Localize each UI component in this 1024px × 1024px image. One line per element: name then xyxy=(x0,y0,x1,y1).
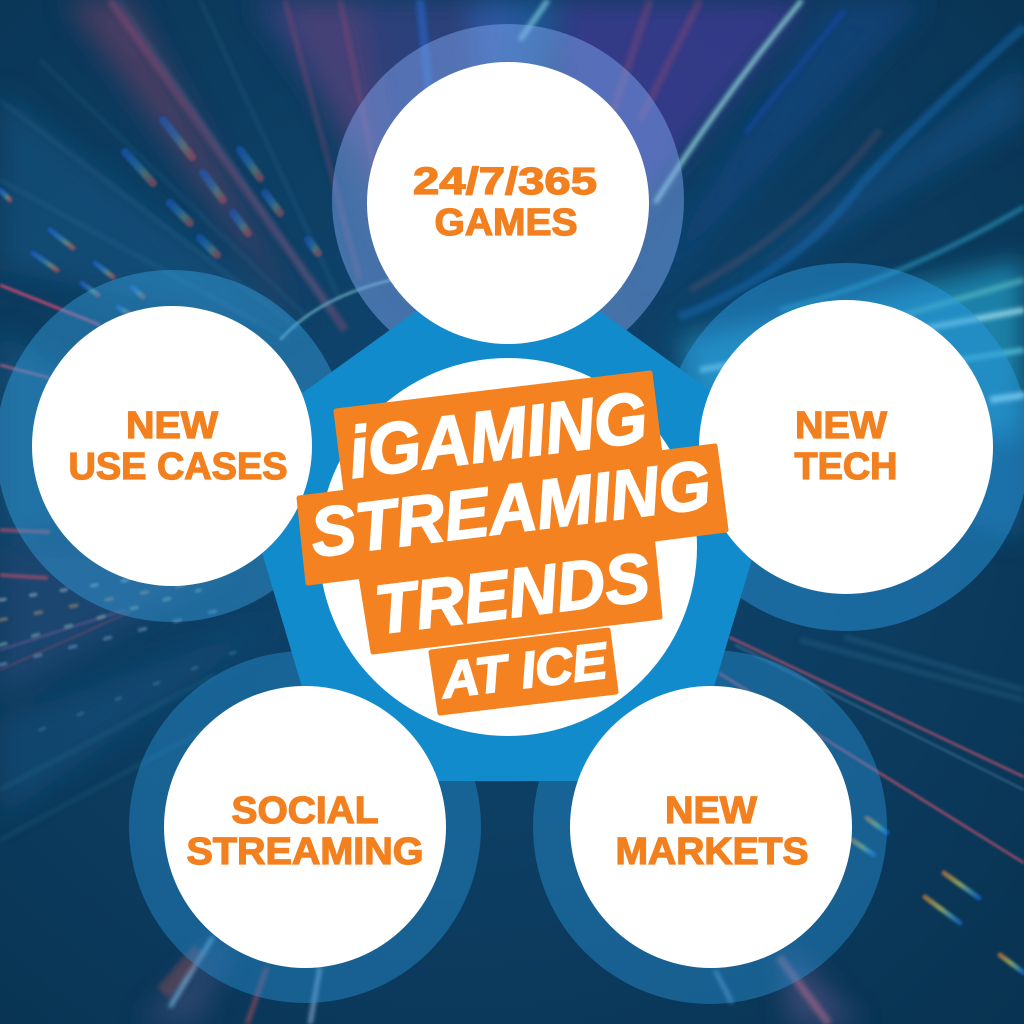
circle: new tech: NEW xyxy=(795,405,887,447)
title text: iGaming: iGAMING xyxy=(344,377,652,494)
pentagon center white circle xyxy=(319,358,697,736)
central title: iGaming Streaming Trends at ICE xyxy=(299,373,726,713)
circle: new markets xyxy=(570,686,852,968)
circle: social streaming: SOCIAL xyxy=(232,790,378,832)
circle: social streaming xyxy=(164,686,446,968)
circle: 24/7/365 games: 24/7/365 xyxy=(413,161,597,203)
circle: social streaming: STREAMING xyxy=(186,831,424,873)
circle: new use cases: USE CASES xyxy=(68,446,288,488)
central pentagon xyxy=(230,245,786,781)
title text: At ICE: AT ICE xyxy=(436,632,612,709)
circle: new tech xyxy=(699,300,993,594)
title text: Trends: TRENDS xyxy=(370,538,654,649)
circle: new use cases xyxy=(32,306,312,586)
title banners xyxy=(299,373,726,713)
circle: new tech: TECH xyxy=(794,446,898,488)
circle: 24/7/365 games: GAMES xyxy=(434,202,578,244)
circle: 24/7/365 games xyxy=(367,62,649,344)
title text: Streaming: STREAMING xyxy=(306,446,715,572)
circle: new use cases: NEW xyxy=(126,405,218,447)
circle: new markets: NEW xyxy=(665,790,757,832)
circle: new markets: MARKETS xyxy=(616,831,808,873)
